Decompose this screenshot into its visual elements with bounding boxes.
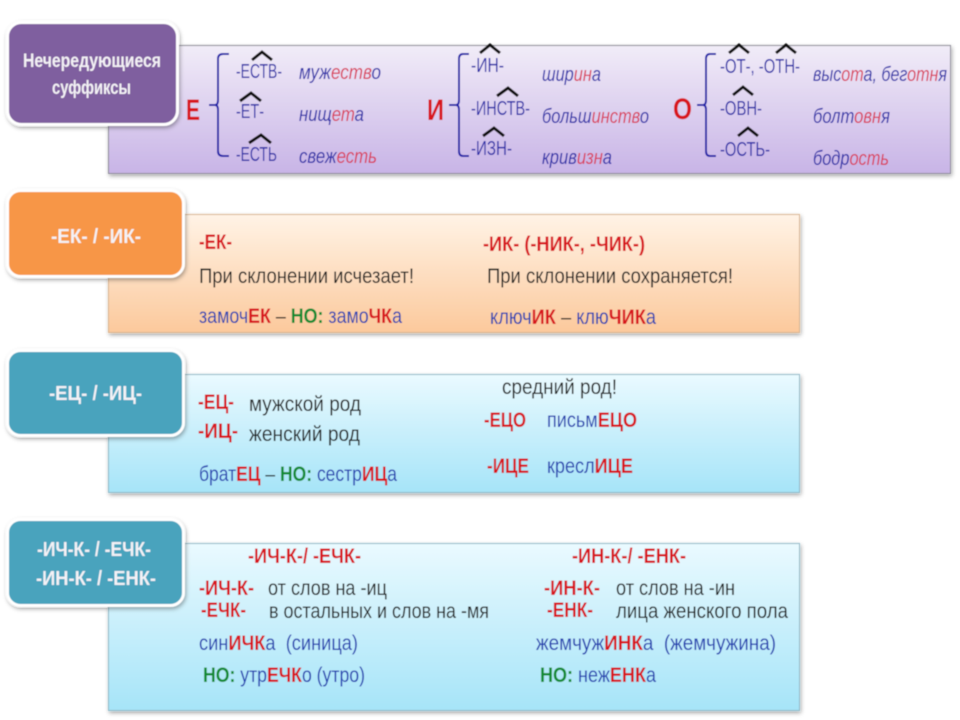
panel: -ЕК- / -ИК-	[8, 190, 800, 332]
text: -ИН-К- / -ЕНК- rule: лица женского пола	[616, 600, 788, 623]
text: -ИЧ-К- / -ЕЧК- rule: -ИЧ-К-	[199, 577, 254, 600]
group: letter Е: -ЕТ-	[236, 101, 264, 123]
text: -ЕЦ- and -ИЦ- rule: -ИЦ-	[198, 420, 238, 443]
group: letter Е: свежесть	[299, 146, 377, 168]
group: letter И: большинство	[542, 106, 649, 128]
text: neuter rule: средний род!	[502, 376, 617, 399]
text: neuter rule: письмЕЦО	[547, 409, 637, 432]
tag: non-alternating suffixes: Нечередующиеся	[23, 51, 161, 72]
tag: -ИЧ-К- / -ЕЧК- / -ИН-К- / -ЕНК-	[8, 520, 184, 606]
group: letter О: болтовня	[813, 106, 890, 128]
text: neuter rule: креслИЦЕ	[547, 455, 633, 478]
group: letter Е: -ЕСТЬ	[236, 144, 277, 166]
tag: -ЕК- / -ИК-: -ЕК- / -ИК-	[51, 226, 141, 248]
text: -ЕК- rule: При склонении исчезает!	[199, 265, 414, 288]
text: -ЕК- rule: замочЕК – НО: замоЧКа	[199, 305, 402, 328]
text: -ИЧ-К- / -ЕЧК- rule: НО: утрЕЧКо (утро)	[203, 664, 365, 687]
text: -ИН-К- / -ЕНК- rule: -ИН-К-	[544, 577, 600, 600]
group: letter Е	[186, 52, 381, 168]
tag: non-alternating suffixes	[8, 22, 178, 124]
group: letter Е: -ЕСТВ-	[236, 61, 282, 83]
tag: -ИЧ-К- / -ЕЧК- / -ИН-К- / -ЕНК-: -ИЧ-К- / -ЕЧК-	[37, 539, 151, 561]
tag: non-alternating suffixes: суффиксы	[52, 78, 131, 99]
text: -ИК- rule: ключИК – клюЧИКа	[490, 306, 656, 329]
group: letter И: -ИН-	[471, 55, 504, 77]
tag: -ЕЦ- / -ИЦ-: -ЕЦ- / -ИЦ-	[49, 383, 142, 405]
text: -ИЧ-К- / -ЕЧК- rule: синИЧКа (синица)	[199, 632, 358, 655]
group: letter О: -ОСТЬ-	[720, 139, 770, 161]
text: -ИК- rule	[483, 233, 733, 329]
text: -ИЧ-К- / -ЕЧК- rule: -ЕЧК-	[201, 599, 246, 622]
text: -ЕЦ- and -ИЦ- rule: мужской род	[249, 393, 361, 416]
group: letter И: кривизна	[542, 147, 612, 169]
group: letter И: -ИНСТВ-	[471, 98, 530, 120]
text: -ИК- rule: -ИК- (-НИК-, -ЧИК-)	[483, 233, 645, 256]
text: -ЕЦ- and -ИЦ- rule: женский род	[249, 423, 360, 446]
text: -ИЧ-К- / -ЕЧК- rule: в остальных и слов на -мя	[269, 600, 489, 623]
text: -ЕК- rule: -ЕК-	[199, 231, 232, 254]
panel: non-alternating suffixes	[8, 22, 950, 174]
text: -ЕК- rule	[199, 231, 414, 328]
text: -ИН-К- / -ЕНК- rule	[536, 545, 788, 687]
text: -ИК- rule: При склонении сохраняется!	[487, 265, 733, 288]
text: -ИН-К- / -ЕНК- rule: НО: нежЕНКа	[540, 664, 656, 687]
text: -ИН-К- / -ЕНК- rule: жемчужИНКа (жемчужина)	[536, 632, 776, 655]
group: letter Е: Е	[186, 94, 200, 127]
group: letter О: -ОВН-	[720, 98, 762, 120]
text: -ИН-К- / -ЕНК- rule: -ИН-К-/ -ЕНК-	[572, 545, 686, 568]
panel: -ЕЦ- / -ИЦ-	[8, 350, 800, 492]
group: letter О: -ОТ-, -ОТН-	[720, 56, 800, 78]
tag: -ЕК- / -ИК-	[8, 190, 184, 276]
text: -ЕЦ- and -ИЦ- rule: братЕЦ – НО: сестрИЦа	[199, 463, 397, 486]
text: neuter rule	[484, 376, 637, 478]
group: letter Е: мужество	[299, 62, 381, 84]
text: -ЕЦ- and -ИЦ- rule	[198, 391, 397, 486]
tag: -ЕЦ- / -ИЦ-	[8, 350, 184, 436]
group: letter О	[673, 45, 947, 170]
text: neuter rule: -ЕЦО	[484, 409, 526, 432]
text: -ИЧ-К- / -ЕЧК- rule: от слов на -иц	[268, 577, 387, 600]
text: -ЕЦ- and -ИЦ- rule: -ЕЦ-	[198, 391, 234, 414]
group: letter О: бодрость	[813, 148, 889, 170]
group: letter О: О	[673, 93, 692, 126]
group: letter И: И	[427, 94, 444, 127]
group: letter И: ширина	[542, 64, 601, 86]
tag: -ИЧ-К- / -ЕЧК- / -ИН-К- / -ЕНК-: -ИН-К- / -ЕНК-	[36, 568, 156, 590]
group: letter И	[427, 45, 649, 169]
group: letter Е: нищета	[299, 104, 364, 126]
text: neuter rule: -ИЦЕ	[487, 455, 529, 478]
text: -ИЧ-К- / -ЕЧК- rule: -ИЧ-К-/ -ЕЧК-	[248, 545, 361, 568]
panel: -ИЧ-К- / -ЕЧК- / -ИН-К- / -ЕНК-	[8, 520, 800, 710]
group: letter О: высота, беготня	[813, 64, 947, 86]
text: -ИН-К- / -ЕНК- rule: -ЕНК-	[547, 599, 593, 622]
text: -ИН-К- / -ЕНК- rule: от слов на -ин	[616, 577, 735, 600]
group: letter И: -ИЗН-	[471, 138, 512, 160]
text: -ИЧ-К- / -ЕЧК- rule	[199, 545, 489, 687]
